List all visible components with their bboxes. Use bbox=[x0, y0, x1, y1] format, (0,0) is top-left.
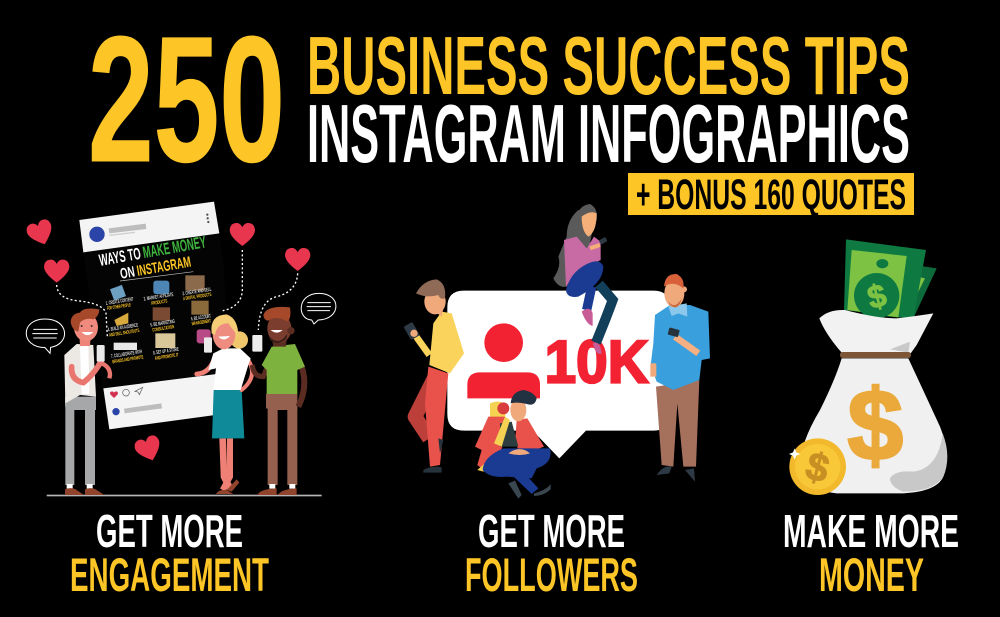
card items: MANAGEMENT bbox=[191, 318, 211, 327]
card items: 4. BUILD AN AUDIENCE bbox=[107, 323, 139, 333]
card items: 1. CREATE CONTENT bbox=[105, 297, 134, 307]
instagram post card: MAKE MONEY bbox=[141, 232, 208, 262]
coin bbox=[789, 438, 846, 495]
caption: followers: GET MORE bbox=[478, 505, 625, 557]
illustration: followers bbox=[404, 204, 710, 499]
person: man sitting bbox=[475, 390, 551, 499]
person: woman bbox=[197, 314, 252, 494]
person: man right bbox=[252, 307, 305, 495]
card items: 8. SET UP A STORE bbox=[153, 347, 180, 357]
illustration: money bag bbox=[789, 239, 947, 495]
caption: followers: FOLLOWERS bbox=[465, 548, 638, 601]
caption: engagement: ENGAGEMENT bbox=[70, 548, 269, 601]
instagram post card: INSTAGRAM bbox=[136, 254, 192, 280]
coin: $ bbox=[801, 444, 834, 492]
caption: engagement bbox=[70, 505, 269, 601]
card items: BRANDS AND PROMOTE bbox=[112, 354, 144, 365]
banknotes bbox=[844, 239, 937, 318]
instagram post card: WAYS TO bbox=[98, 244, 142, 270]
caption: followers bbox=[465, 505, 638, 601]
card items: AND PROMOTE IT bbox=[154, 352, 179, 362]
card items: 7. COLLABORATE WITH bbox=[111, 349, 143, 360]
illustration: engagement bbox=[25, 202, 336, 496]
speech bubbles bbox=[26, 293, 336, 353]
bag bbox=[800, 310, 947, 493]
caption: engagement: GET MORE bbox=[96, 505, 243, 557]
person: man right bbox=[651, 274, 710, 482]
ground line bbox=[47, 495, 322, 496]
hearts bbox=[25, 218, 310, 465]
card items: 3. CREATE AND SELL bbox=[182, 287, 212, 297]
person: woman sitting bbox=[553, 204, 613, 354]
instagram post card: ON bbox=[119, 264, 136, 283]
person: man left bbox=[404, 279, 464, 473]
dollar on bag: $ bbox=[848, 369, 903, 481]
speech bubble 10K bbox=[447, 291, 670, 458]
card items: 5. BE MARKETING bbox=[150, 319, 175, 329]
caption: money: MONEY bbox=[819, 548, 924, 601]
card items: 2. MARKET AFFILIATE bbox=[143, 292, 174, 303]
person: man left bbox=[64, 309, 110, 495]
instagram post card bbox=[79, 202, 230, 429]
icon: person bbox=[467, 323, 540, 398]
dashed connectors bbox=[57, 250, 298, 337]
card items: AND SELL SHOUTOUTS bbox=[109, 328, 140, 339]
card items bbox=[105, 275, 212, 365]
caption: money bbox=[783, 505, 959, 601]
card items: CONSULTATION bbox=[152, 324, 175, 334]
card items: PRODUCTS bbox=[151, 298, 168, 307]
card items: FOR OTHER PEOPLE bbox=[107, 302, 132, 312]
card items: 6. BE ACCOUNT bbox=[191, 314, 212, 323]
label: 10K: 10K bbox=[545, 328, 649, 396]
dollar on note: $ bbox=[864, 277, 890, 316]
title: 250: 250 bbox=[88, 0, 285, 199]
card items: A DIGITAL PRODUCTS bbox=[183, 292, 212, 302]
